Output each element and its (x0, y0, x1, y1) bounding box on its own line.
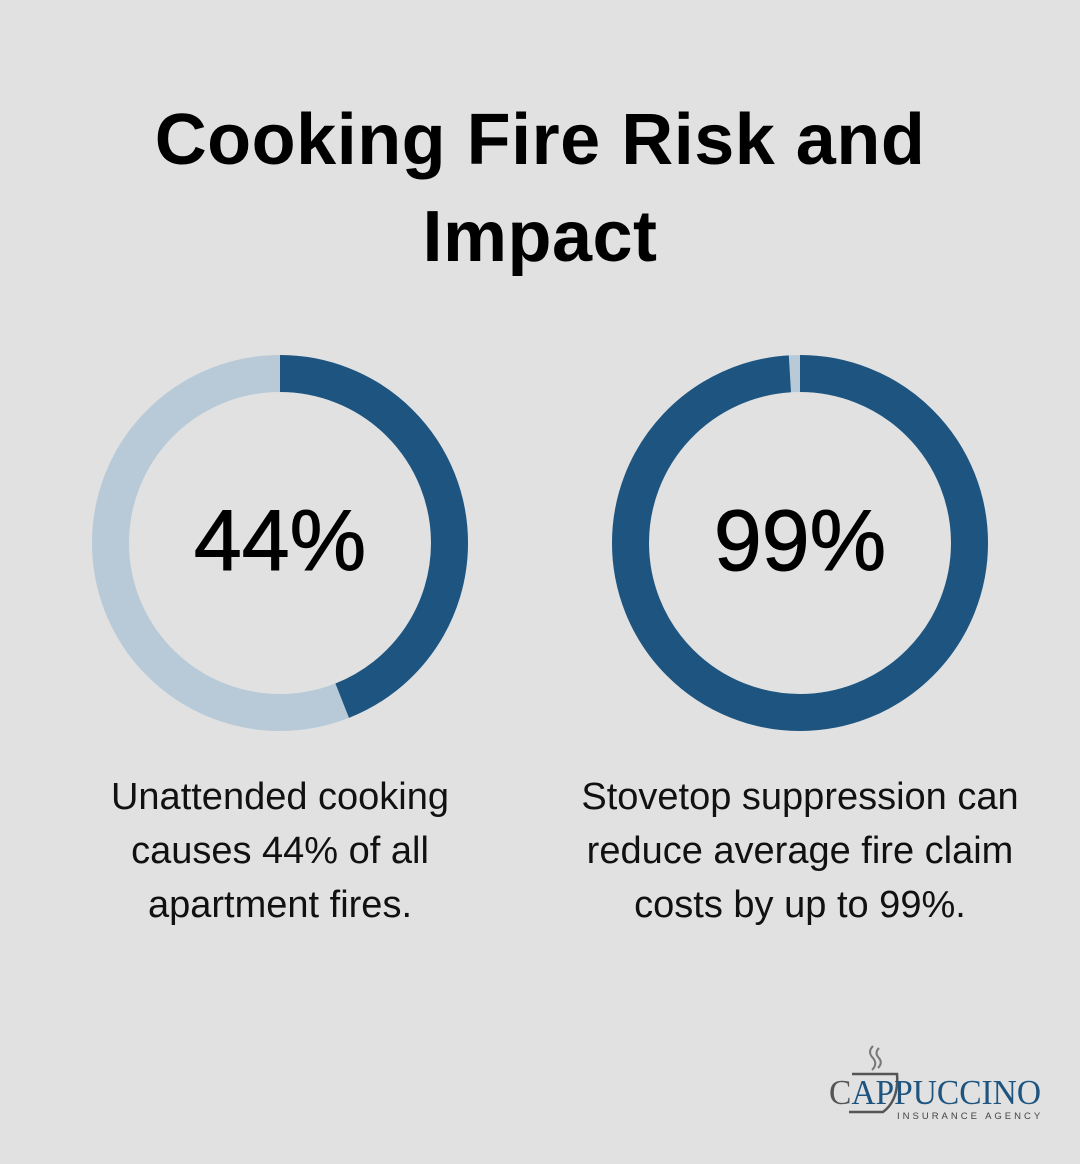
icon: cup (849, 1074, 897, 1112)
donut charts (92, 355, 988, 731)
title: Impact (422, 197, 658, 277)
donut: 44% (110, 374, 450, 712)
caption: left: causes 44% of all (131, 830, 429, 872)
logo (829, 1045, 1043, 1122)
caption: left (111, 776, 449, 926)
caption: right: reduce average fire claim (587, 830, 1013, 872)
donut: 99%: 99% (714, 493, 886, 589)
title (155, 100, 925, 277)
caption: right (581, 776, 1019, 926)
caption: right: Stovetop suppression can (581, 776, 1019, 818)
caption: right: costs by up to 99%. (634, 884, 966, 926)
caption: left: Unattended cooking (111, 776, 449, 818)
donut: 44%: 44% (194, 493, 366, 589)
icon: steam (870, 1046, 881, 1070)
logo: INSURANCE AGENCY (897, 1111, 1043, 1122)
title: Cooking Fire Risk and (155, 100, 925, 180)
caption: left: apartment fires. (148, 884, 412, 926)
donut: 99% (630, 374, 970, 712)
logo text: CAPPUCCINO (829, 1073, 1041, 1112)
